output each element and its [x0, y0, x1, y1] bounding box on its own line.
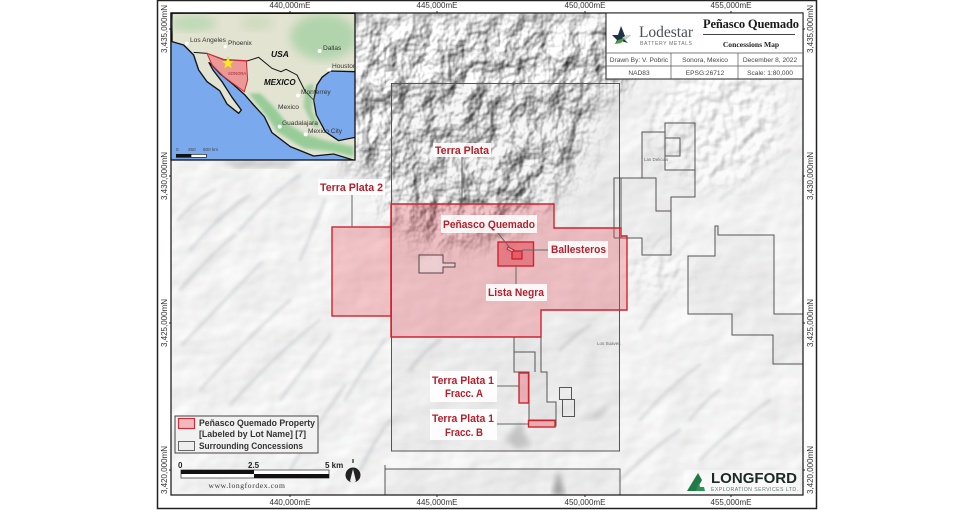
inset: place names: 0: [176, 147, 179, 152]
logo: Longford wordmark: LONGFORD: [711, 470, 797, 487]
title block: [606, 13, 803, 79]
scale bar: 0: [178, 461, 183, 470]
legend text: Surrounding Concessions: [199, 441, 303, 451]
inset: place names: Guadalajara: [282, 120, 318, 127]
southern concession: [385, 469, 620, 495]
scale bar: 5 km: [325, 461, 343, 470]
label: Terra Plata 1 Fracc. B: Fracc. B: [445, 427, 483, 439]
inset: place names: USA: [271, 49, 289, 59]
label: Ballesteros: Ballesteros: [551, 244, 606, 256]
lot: Terra Plata 2: [332, 227, 391, 316]
inset: place names: MEXICO: [264, 78, 296, 87]
website address: www.longfordex.com: [209, 481, 285, 490]
Longford logo: [684, 470, 800, 494]
legend swatch: concessions: [178, 442, 194, 450]
label: Lista Negra: Lista Negra: [488, 287, 545, 299]
map metadata cells: EPSG:26712: [686, 70, 725, 77]
map metadata cells: Drawn By: V. Pobric: [610, 57, 669, 64]
inset: place names: Mexico City: [308, 128, 343, 135]
northeast concessions: [614, 123, 695, 255]
grid tick labels: 445,000mE: [417, 1, 457, 10]
inset: place names: Phoenix: [228, 40, 253, 47]
grid tick labels: 445,000mE: [417, 498, 457, 507]
label: Terra Plata: Terra Plata: [435, 145, 490, 157]
inset: place names: [176, 37, 357, 152]
label: Terra Plata 1 Fracc. B: [430, 409, 497, 440]
map metadata cells: December 8, 2022: [743, 57, 797, 64]
grid tick labels: 3,420,000mN: [806, 446, 815, 494]
grid tick labels: 3,425,000mN: [806, 299, 815, 347]
map subtitle: Concessions Map: [723, 40, 779, 49]
inset: place names: SONORA: [228, 71, 246, 76]
grid tick labels: 455,000mE: [711, 498, 751, 507]
grid tick labels: 3,430,000mN: [160, 152, 169, 200]
inset ocean: [171, 13, 355, 160]
scale bar: 2.5: [248, 461, 260, 470]
map frame: [171, 13, 803, 495]
lot: Terra Plata: [391, 204, 627, 337]
large central concession: [392, 84, 620, 451]
concessions map figure: [156, 0, 818, 510]
legend: [175, 416, 318, 453]
legend text: Peñasco Quemado Property: [199, 418, 315, 428]
leader lines: [352, 157, 548, 424]
grid tick labels: 3,435,000mN: [806, 5, 815, 53]
lot: Terra Plata 1 Fracc. B: [528, 420, 555, 427]
grid tick labels: 3,430,000mN: [806, 152, 815, 200]
inset: location star: [222, 57, 234, 69]
label: Ballesteros: [548, 241, 608, 258]
Peñasco Quemado property lots: [332, 204, 627, 427]
legend text: [199, 418, 315, 451]
inset: place names: Houston: [332, 63, 357, 70]
map metadata cells: NAD83: [628, 70, 650, 77]
label: Terra Plata 1 Fracc. B: Terra Plata 1: [432, 413, 494, 425]
inset: place names: Mexico: [278, 104, 299, 111]
inset land: [170, 13, 357, 161]
label: Peñasco Quemado: Peñasco Quemado: [443, 219, 535, 231]
icon: north arrow: [346, 459, 360, 484]
grid tick labels: 440,000mE: [270, 1, 310, 10]
inset: USA-Mexico border: [194, 52, 305, 92]
grid tick labels: 3,435,000mN: [160, 5, 169, 53]
hillshade terrain base map: [171, 13, 803, 495]
inset: city markers: [185, 42, 331, 136]
map metadata cells: [610, 57, 797, 77]
grid tick labels: [160, 1, 815, 507]
logo: Longford mark: [687, 473, 705, 491]
label: Terra Plata 1 Fracc. A: [430, 371, 497, 402]
grid tick labels: 450,000mE: [565, 498, 605, 507]
label: Terra Plata 1 Fracc. A: Terra Plata 1: [432, 375, 494, 387]
inset: place names: Los Angeles: [190, 37, 227, 44]
logo: Lodestar star: [612, 26, 631, 44]
lot: Peñasco Quemado: [507, 247, 514, 252]
grid tick labels: 3,425,000mN: [160, 299, 169, 347]
map metadata cells: Sonora, Mexico: [682, 57, 728, 64]
southern block chain: [514, 337, 556, 426]
surrounding concessions outlines: [385, 84, 803, 495]
lot: Ballesteros: [512, 251, 522, 259]
grid tick labels: 440,000mE: [270, 498, 310, 507]
outer frame: [158, 0, 816, 508]
logo: Battery Metals tagline: BATTERY METALS: [640, 41, 693, 47]
label: Terra Plata 1 Fracc. A: Fracc. A: [445, 388, 483, 400]
Las Delicias place label: Las Delicias: [644, 157, 669, 162]
map title: Peñasco Quemado: [703, 17, 799, 31]
label: Terra Plata 2: Terra Plata 2: [320, 182, 383, 194]
scale bar: [178, 461, 343, 478]
inset: place names: 250: [188, 147, 196, 152]
inset: place names: 500 km: [203, 147, 218, 152]
hole in property: [419, 255, 455, 273]
grid tick labels: 450,000mE: [565, 1, 605, 10]
inner holdout concession: [419, 255, 455, 273]
small southern blocks: [560, 388, 574, 416]
east concession: [688, 226, 803, 364]
grid tick labels: 3,420,000mN: [160, 446, 169, 494]
lot: Terra Plata 1 Fracc. A: [519, 373, 528, 403]
inset scale bar: [176, 154, 206, 157]
logo: Lodestar wordmark: Lodestar: [639, 24, 694, 41]
legend text: [Labeled by Lot Name] [7]: [199, 429, 306, 439]
map metadata cells: Scale: 1:80,000: [747, 70, 793, 77]
inset location map: [170, 13, 357, 161]
inset: place names: Dallas: [323, 45, 342, 52]
logo: Longford tagline: EXPLORATION SERVICES LTD.: [711, 487, 798, 493]
inset: Sonora highlight: [207, 53, 248, 92]
grid tick labels: 455,000mE: [711, 1, 751, 10]
inset: place names: Monterrey: [301, 89, 331, 96]
label: Lista Negra: [486, 284, 547, 301]
legend swatch: property: [178, 418, 194, 428]
lot: Lista Negra: [498, 242, 534, 266]
label: Peñasco Quemado: [441, 215, 537, 233]
Los Suaves place label: Los Suaves: [597, 341, 621, 346]
